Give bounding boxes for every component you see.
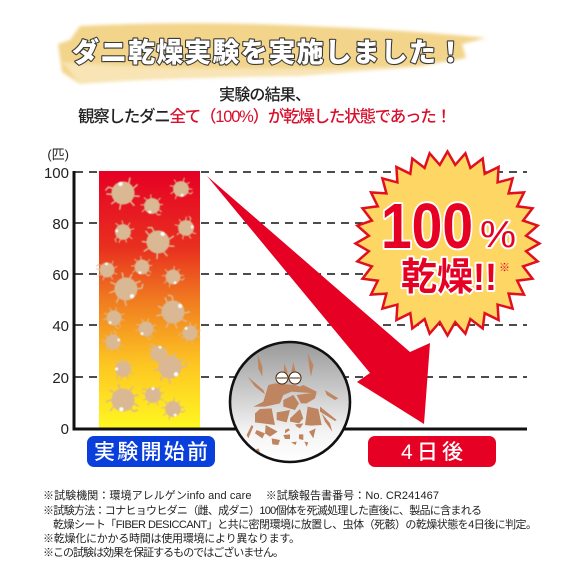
arrow: downward red — [207, 176, 430, 424]
y-axis labels: 40 — [52, 318, 69, 335]
footnotes: ※試験機関：環境アレルゲンinfo and care ※試験報告書番号：No. CR241467 — [43, 488, 439, 502]
badge text: ※ — [499, 262, 510, 274]
title banner brush stroke — [58, 23, 486, 84]
footnotes: ※乾燥化にかかる時間は使用環境により異なります。 — [43, 532, 300, 545]
footnotes: ※試験方法：コナヒョウヒダニ（雌、成ダニ）100個体を死滅処理した直後に、製品に含まれる — [43, 503, 482, 517]
badge text: 100 — [381, 190, 473, 262]
label: after 4 days — [368, 436, 496, 467]
badge text — [381, 190, 516, 299]
bar: before experiment — [96, 171, 204, 428]
y-axis labels: 60 — [52, 267, 69, 284]
y-axis labels — [44, 147, 69, 438]
badge text: % — [480, 214, 516, 256]
y-axis labels: 80 — [52, 216, 69, 233]
subtitle: 実験の結果、 — [219, 86, 311, 104]
mite eyes — [276, 372, 301, 384]
y-axis labels: 0 — [61, 421, 69, 438]
title: ダニ乾燥実験を実施しました！ — [72, 37, 464, 68]
badge text: 乾燥!! — [401, 257, 497, 299]
label: before — [87, 436, 215, 467]
y-axis labels: 20 — [52, 370, 69, 387]
footnotes: ※この試験は効果を保証するものではございません。 — [43, 545, 284, 559]
axes — [74, 171, 527, 429]
mites — [96, 177, 204, 421]
starburst badge — [356, 152, 540, 336]
dried mite — [247, 353, 338, 452]
y-axis labels: 100 — [44, 165, 69, 182]
subtitle: 観察したダニ全て（100%）が乾燥した状態であった！ — [78, 106, 452, 126]
subtitle — [78, 86, 452, 126]
y-axis labels: (匹) — [47, 147, 69, 162]
label: before: 実験開始前 — [94, 441, 208, 464]
magnified dried mite circle — [230, 342, 350, 462]
label: after 4 days: 4日後 — [401, 441, 463, 464]
footnotes: 乾燥シート「FIBER DESICCANT」と共に密閉環境に放置し、虫体（死骸）の乾燥状態を4日後に判定。 — [53, 517, 537, 531]
chart y-axis gridlines — [75, 172, 527, 377]
footnotes — [43, 488, 537, 559]
